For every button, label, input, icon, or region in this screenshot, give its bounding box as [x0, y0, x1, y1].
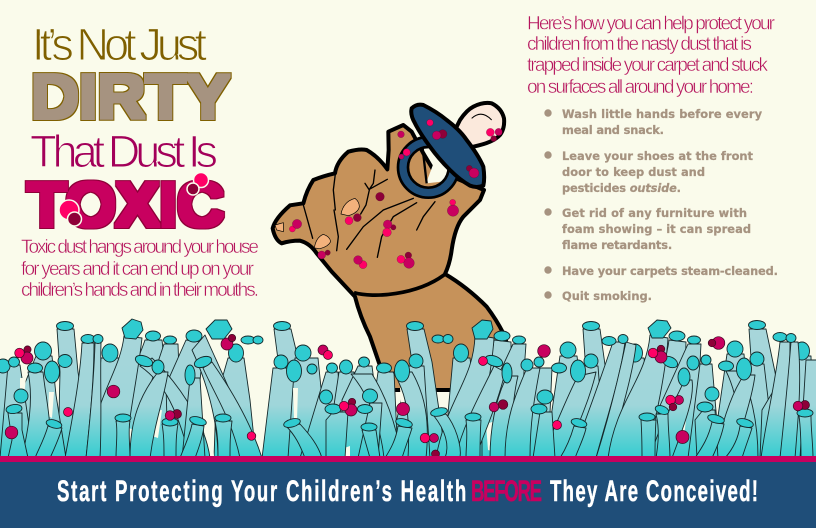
- hand and arm: [273, 125, 523, 390]
- wrist line: [354, 275, 444, 295]
- pacifier shield: [411, 105, 484, 187]
- bullet list of tips: [544, 107, 778, 303]
- carpet back row heads: [0, 320, 810, 374]
- bullet list of tips: flame retardants.: [562, 238, 672, 252]
- bullet list of tips: meal and snack.: [562, 123, 664, 137]
- dust specks on the hand: [289, 119, 502, 269]
- intro paragraph left: for years and it can end up on your: [21, 259, 255, 280]
- pacifier nipple highlight: [472, 114, 492, 120]
- pacifier ring: [403, 142, 454, 193]
- bullet list of tips: Get rid of any furniture with: [562, 206, 747, 220]
- intro paragraph right: trapped inside your carpet and stuck: [527, 55, 768, 76]
- carpet middle row stems: [22, 335, 800, 458]
- bullet list of tips: Quit smoking.: [562, 289, 652, 303]
- intro paragraph right: on surfaces all around your home:: [527, 77, 754, 98]
- footer slogan: They Are Conceived!: [550, 475, 758, 508]
- carpet front row stems: [8, 410, 813, 458]
- intro paragraph right: children from the nasty dust that is: [527, 34, 752, 55]
- footer slogan: BEFORE: [471, 475, 542, 508]
- pacifier nipple: [450, 103, 504, 151]
- carpet back row stems: [0, 329, 816, 458]
- bullet list of tips: door to keep dust and: [562, 165, 705, 179]
- carpet middle row heads: [14, 319, 796, 404]
- bullet list of tips: foam showing – it can spread: [562, 222, 751, 236]
- carpet gaps: [20, 378, 686, 458]
- title: That Dust Is: That Dust Is: [30, 126, 218, 177]
- carpet fibres: [0, 319, 816, 458]
- footer slogan: Start Protecting Your Children’s Health: [57, 475, 466, 508]
- intro paragraph right: Here’s how you can help protect your: [527, 14, 776, 34]
- hand crease lines: [303, 170, 435, 257]
- fingernails: [275, 198, 359, 249]
- intro paragraph left: Toxic dust hangs around your house: [21, 237, 259, 258]
- intro paragraph right: [527, 14, 776, 98]
- carpet front row heads: [5, 402, 813, 431]
- bullet list of tips: pesticides outside.: [562, 181, 681, 195]
- illustration: hand holding pacifier: [273, 103, 523, 390]
- index finger edge: [423, 148, 427, 183]
- gap inside pacifier ring: [426, 155, 457, 183]
- footer banner: [0, 462, 816, 528]
- title: TOXIC with dust specks: TOXIC: [27, 171, 224, 240]
- intro paragraph left: [21, 237, 259, 301]
- title: It's Not Just: It’s Not Just: [32, 19, 207, 70]
- title: DIRTY: DIRTY: [31, 63, 230, 132]
- bullet list of tips: Leave your shoes at the front: [562, 149, 754, 163]
- intro paragraph left: children’s hands and in their mouths.: [21, 280, 259, 301]
- footer slogan: [57, 475, 758, 508]
- bullet list of tips: Wash little hands before every: [562, 107, 763, 121]
- magenta stripe: [0, 456, 816, 462]
- bullet list of tips: Have your carpets steam-cleaned.: [562, 264, 778, 278]
- dust specks on the carpet: [5, 334, 809, 458]
